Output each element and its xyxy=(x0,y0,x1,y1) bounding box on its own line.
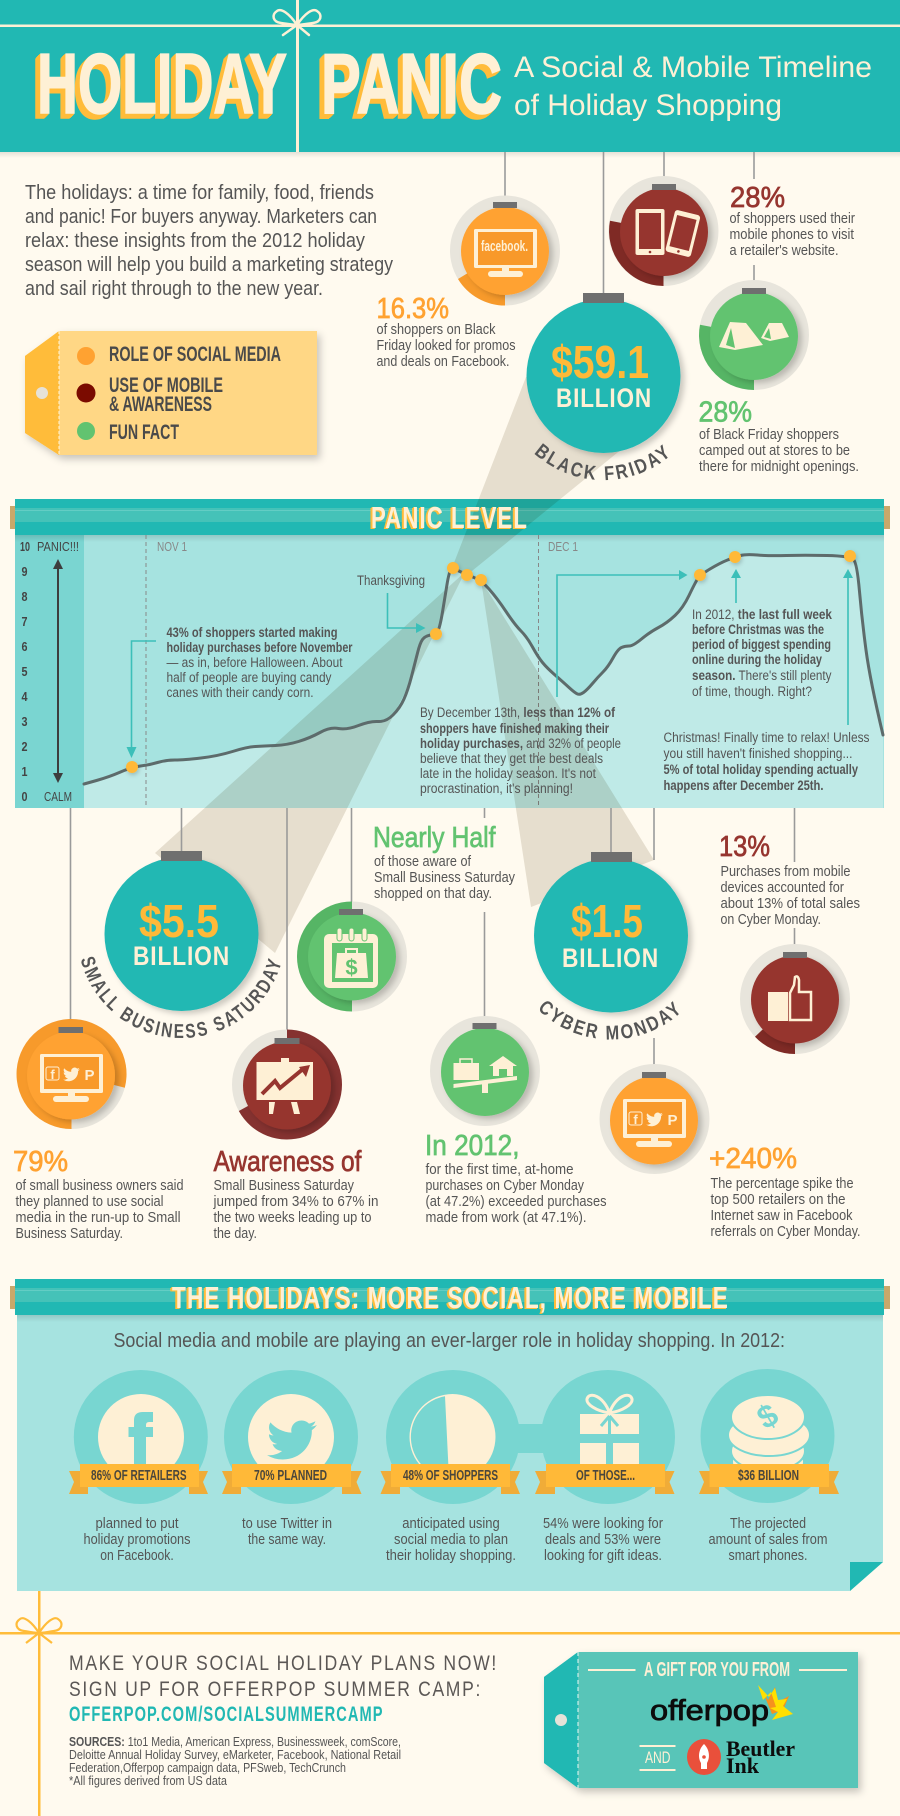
ribbon: 86% OF RETAILERS xyxy=(91,1468,187,1484)
chart axis xyxy=(20,539,578,804)
ribbon xyxy=(69,1464,208,1494)
chart axis: 4 xyxy=(22,689,28,704)
chart note: december 13: late in the holiday season. It's not xyxy=(420,766,596,781)
item: gift: looking for gift ideas. xyxy=(544,1548,662,1564)
stat: 79% xyxy=(13,1146,184,1242)
stat: awareness: the day. xyxy=(214,1226,257,1242)
icon: facebook monitor xyxy=(474,229,537,277)
item: 48% pie: anticipated using xyxy=(402,1516,500,1532)
icon: seesaw xyxy=(454,1056,517,1093)
beam: cyber monday xyxy=(481,580,654,907)
stat: in 2012: In 2012, xyxy=(425,1130,520,1162)
item: 48% pie: their holiday shopping. xyxy=(386,1548,516,1564)
icon: f xyxy=(128,1412,153,1465)
icon: social monitor: f xyxy=(633,1112,638,1127)
chart axis: PANIC!!! xyxy=(37,539,79,554)
label: small business saturday: SMALL BUSINESS SATURDAY xyxy=(81,956,280,1038)
chart note: christmas xyxy=(664,730,870,793)
ornament: small business saturday: BILLION xyxy=(133,941,230,971)
and divider: AND xyxy=(645,1748,670,1767)
chart note: november: 43% of shoppers started making xyxy=(166,625,338,640)
item: facebook: holiday promotions xyxy=(84,1532,190,1548)
ornament: small business saturday xyxy=(81,808,280,1038)
logo: beutler ink xyxy=(687,1736,795,1778)
chart axis: 10 xyxy=(20,539,30,554)
header banner xyxy=(0,0,900,158)
icon: gift box xyxy=(580,1395,639,1465)
logo: beutler ink: Beutler xyxy=(726,1736,795,1761)
title: holiday panic: HOLIDAY xyxy=(37,37,287,132)
chart note: november: — as in, before Halloween. About xyxy=(166,655,343,670)
chart axis: CALM xyxy=(44,789,72,804)
title: holiday panic: PANIC xyxy=(321,37,502,132)
ornament: black friday: $59.1 xyxy=(551,336,649,388)
chart note: november xyxy=(166,625,353,700)
chart note: last full week: In 2012, the last full week xyxy=(692,607,832,622)
chart note: november: canes with their candy corn. xyxy=(166,685,314,700)
stat: 28% camped: there for midnight openings. xyxy=(699,459,859,475)
chart axis: 0 xyxy=(22,789,28,804)
and divider xyxy=(640,1745,676,1771)
ornament: cyber monday: $1.5 xyxy=(571,895,643,947)
intro text: relax: these insights from the 2012 holiday xyxy=(25,230,365,252)
stat: 13%: Purchases from mobile xyxy=(720,864,850,880)
icon: social monitor xyxy=(40,1054,103,1102)
chart note: last full week xyxy=(692,607,832,699)
icon: phones xyxy=(636,209,701,257)
ribbon: 70% PLANNED xyxy=(254,1468,327,1484)
stat: awareness: the two weeks leading up to xyxy=(214,1210,372,1226)
stat: 28% mobile xyxy=(730,182,855,259)
stat: in 2012: for the first time, at-home xyxy=(426,1162,574,1178)
stat: 16.3%: Friday looked for promos xyxy=(376,338,516,354)
ribbon xyxy=(380,1464,520,1494)
chart note: last full week: of time, though. Right? xyxy=(692,684,812,699)
sources xyxy=(69,1735,401,1788)
stat: +240% xyxy=(709,1143,860,1240)
stat: 28% camped: 28% xyxy=(698,396,752,428)
ribbon xyxy=(699,1464,839,1494)
chart axis: 8 xyxy=(22,589,28,604)
chart note: november: half of people are buying candy xyxy=(166,670,332,685)
ornament: black friday xyxy=(526,152,687,480)
gift tag: A GIFT FOR YOU FROM xyxy=(644,1659,790,1681)
chart note: december 13: By December 13th, less than 12% of xyxy=(420,705,615,720)
ornament: cyber monday: BILLION xyxy=(562,943,659,973)
stat: 28% mobile: a retailer's website. xyxy=(730,243,838,259)
item: coins: The projected xyxy=(730,1516,806,1532)
icon: facebook monitor: facebook. xyxy=(481,238,528,255)
item: 48% pie: social media to plan xyxy=(394,1532,508,1548)
item: twitter: to use Twitter in xyxy=(242,1516,332,1532)
icon: social monitor: P xyxy=(667,1112,678,1129)
chart axis: NOV 1 xyxy=(157,539,187,554)
stat: 13%: 13% xyxy=(719,831,770,863)
stat: 28% mobile: mobile phones to visit xyxy=(730,227,854,243)
panel: more social more mobile background xyxy=(17,1315,883,1591)
stat: in 2012: (at 47.2%) exceeded purchases xyxy=(426,1194,606,1210)
chart note: last full week: season. There's still plenty xyxy=(692,668,832,683)
beam: black friday xyxy=(452,377,660,575)
legend tag: FUN FACT xyxy=(109,421,179,444)
ornament: home and work seesaw xyxy=(430,808,540,1126)
stat: nearly half: Small Business Saturday xyxy=(374,870,516,886)
banner: panic level xyxy=(10,499,890,535)
call to action xyxy=(69,1652,498,1726)
icon: easel chart xyxy=(256,1058,313,1114)
stat: in 2012: made from work (at 47.1%). xyxy=(426,1210,586,1226)
stat: nearly half xyxy=(373,822,516,902)
section intro: Social media and mobile are playing an ever-larger role in holiday shopping. In 2012: xyxy=(114,1330,785,1352)
intro text: The holidays: a time for family, food, friends xyxy=(25,182,374,204)
chart note: november: holiday purchases before November xyxy=(166,640,353,655)
icon: calendar with bag: $ xyxy=(345,955,358,980)
chart markers xyxy=(126,550,856,773)
string: to mobile stat xyxy=(753,152,755,179)
chart axis: 2 xyxy=(22,739,28,754)
chart note: last full week: before Christmas was the xyxy=(692,622,824,637)
chart axis: 9 xyxy=(22,564,28,579)
icon: bird xyxy=(267,1421,317,1460)
stat: 16.3%: of shoppers on Black xyxy=(376,322,496,338)
icon: tents xyxy=(719,322,789,350)
ribbon: 48% OF SHOPPERS xyxy=(403,1468,498,1484)
ornament: awareness chart xyxy=(232,808,342,1140)
intro text: and panic! For buyers anyway. Marketers can xyxy=(25,206,377,228)
stat: +240%: referrals on Cyber Monday. xyxy=(710,1224,860,1240)
chart axis: 3 xyxy=(22,714,28,729)
item: gift: 54% were looking for xyxy=(543,1516,663,1532)
chart axis: 5 xyxy=(22,664,28,679)
label: black friday: BLACK FRIDAY xyxy=(534,443,668,480)
ornament: social monitor +240% xyxy=(600,808,710,1174)
logo: beutler ink: Ink xyxy=(726,1753,760,1778)
stat: awareness: Awareness of xyxy=(214,1146,362,1178)
panic level heading: PANIC LEVEL xyxy=(371,500,528,535)
subtitle xyxy=(514,51,872,122)
icon: social monitor xyxy=(623,1099,686,1147)
icon: social monitor: P xyxy=(84,1067,95,1084)
item: coins: amount of sales from xyxy=(708,1532,828,1548)
call to action: OFFERPOP.COM/SOCIALSUMMERCAMP xyxy=(69,1703,384,1726)
chart axis: 1 xyxy=(22,764,28,779)
beam: small business saturday xyxy=(155,572,465,953)
stat: 79%: 79% xyxy=(13,1146,68,1178)
stat: 79%: of small business owners said xyxy=(16,1178,184,1194)
icon: calendar with bag xyxy=(324,928,378,988)
chart note: december 13: holiday purchases, and 32% of people xyxy=(420,736,621,751)
stat: 13%: on Cyber Monday. xyxy=(720,912,821,928)
ribbon: $36 BILLION xyxy=(738,1468,799,1484)
sources: Federation,Offerpop campaign data, PFSweb, TechCrunch xyxy=(69,1761,346,1775)
connector between circles xyxy=(516,1424,543,1453)
ornament: black friday: BILLION xyxy=(556,383,652,413)
stat: awareness xyxy=(213,1146,378,1242)
chart note: december 13: shoppers have finished making their xyxy=(420,721,610,736)
chart axis: 6 xyxy=(22,639,28,654)
legend tag: USE OF MOBILE xyxy=(109,374,223,397)
stat: 79%: they planned to use social xyxy=(16,1194,164,1210)
ornament: facebook black friday xyxy=(450,152,560,306)
stat: 16.3%: and deals on Facebook. xyxy=(376,354,510,370)
panic curve xyxy=(84,555,883,784)
ornament: tents xyxy=(699,265,809,390)
chart note: last full week: period of biggest spending xyxy=(692,637,831,652)
stat: 13% xyxy=(719,831,860,928)
label: cyber monday: CYBER MONDAY xyxy=(540,1001,679,1040)
stat: +240%: The percentage spike the xyxy=(710,1176,854,1192)
stat: nearly half: of those aware of xyxy=(374,854,472,870)
icon: thumb xyxy=(768,976,811,1021)
legend tag: ROLE OF SOCIAL MEDIA xyxy=(109,343,281,366)
legend tag: & AWARENESS xyxy=(109,393,212,416)
stat: 28% camped xyxy=(698,396,859,475)
chart note: december 13: procrastination, it's planning! xyxy=(420,781,573,796)
sources: *All figures derived from US data xyxy=(69,1774,227,1788)
stat: 28% mobile: of shoppers used their xyxy=(730,211,855,227)
stat: 28% camped: of Black Friday shoppers xyxy=(699,427,839,443)
item: gift xyxy=(535,1370,675,1564)
subtitle: A Social & Mobile Timeline xyxy=(514,51,872,84)
panel: panic level chart xyxy=(15,535,884,808)
chart note: last full week: online during the holiday xyxy=(692,652,822,667)
stat: in 2012: purchases on Cyber Monday xyxy=(426,1178,585,1194)
chart axis: DEC 1 xyxy=(548,539,578,554)
stat: +240%: Internet saw in Facebook xyxy=(710,1208,853,1224)
item: coins xyxy=(699,1369,839,1564)
item: coins: smart phones. xyxy=(728,1548,808,1564)
stat: 16.3% xyxy=(376,293,516,370)
logo: offerpop: offerpop xyxy=(650,1695,769,1727)
chart note: christmas: Christmas! Finally time to relax! Unless xyxy=(664,730,870,745)
stat: nearly half: Nearly Half xyxy=(373,822,496,854)
item: gift: deals and 53% were xyxy=(545,1532,661,1548)
ornament: thumbs up xyxy=(740,808,850,1054)
icon: social monitor: f xyxy=(50,1067,55,1082)
ribbon: OF THOSE... xyxy=(576,1468,635,1484)
chart axis: 7 xyxy=(22,614,28,629)
ornament: mobile phones xyxy=(608,152,718,286)
call to action: SIGN UP FOR OFFERPOP SUMMER CAMP: xyxy=(69,1678,482,1701)
ribbon xyxy=(222,1464,362,1494)
footer ribbon xyxy=(0,1591,900,1816)
stat: 79%: media in the run-up to Small xyxy=(16,1210,180,1226)
gift tag xyxy=(544,1652,858,1788)
item: twitter xyxy=(222,1370,362,1548)
stat: 28% camped: camped out at stores to be xyxy=(699,443,850,459)
stat: +240%: +240% xyxy=(709,1143,797,1175)
chart note: thanksgiving: Thanksgiving xyxy=(357,573,425,588)
item: twitter: the same way. xyxy=(248,1532,326,1548)
item: facebook xyxy=(69,1370,208,1564)
stat: 79%: Business Saturday. xyxy=(16,1226,123,1242)
subtitle: of Holiday Shopping xyxy=(514,89,782,122)
stat: awareness: jumped from 34% to 67% in xyxy=(213,1194,378,1210)
ornament: cyber monday xyxy=(534,808,694,1040)
logo: offerpop xyxy=(650,1685,793,1727)
item: coins: $ xyxy=(751,1396,784,1436)
stat: +240%: top 500 retailers on the xyxy=(710,1192,846,1208)
icon: ribbon bow xyxy=(274,10,320,35)
ornament: calendar xyxy=(297,808,407,1012)
intro text xyxy=(25,182,393,300)
intro text: season will help you build a marketing strategy xyxy=(25,254,393,276)
chart note: christmas: 5% of total holiday spending actually xyxy=(664,762,858,777)
chart arrows xyxy=(126,569,853,758)
stat: 16.3%: 16.3% xyxy=(376,293,449,325)
string: to small business owners stat xyxy=(70,808,72,1027)
chart note: december 13: believe that they get the best deals xyxy=(420,751,603,766)
stat: in 2012 xyxy=(425,1130,606,1226)
stat: 28% mobile: 28% xyxy=(730,182,785,214)
stat: nearly half: shopped on that day. xyxy=(374,886,492,902)
sources: Deloitte Annual Holiday Survey, eMarketer, Facebook, National Retail xyxy=(69,1748,401,1762)
chart note: christmas: happens after December 25th. xyxy=(664,778,824,793)
stat: 13%: devices accounted for xyxy=(720,880,844,896)
legend tag xyxy=(25,331,317,455)
item: facebook: planned to put xyxy=(96,1516,178,1532)
sources: SOURCES: 1to1 Media, American Express, Businessweek, comScore, xyxy=(69,1735,401,1749)
item: facebook: on Facebook. xyxy=(100,1548,174,1564)
stat: 13%: about 13% of total sales xyxy=(720,896,860,912)
chart note: christmas: you still haven't finished shopping... xyxy=(664,746,852,761)
ornament: social monitor 79% xyxy=(16,1019,127,1129)
ribbon xyxy=(535,1464,674,1494)
intro text: and sail right through to the new year. xyxy=(25,278,323,300)
call to action: MAKE YOUR SOCIAL HOLIDAY PLANS NOW! xyxy=(69,1652,498,1675)
ornament: small business saturday: $5.5 xyxy=(139,895,219,947)
icon: coin stack xyxy=(728,1395,810,1480)
chart note: december 13 xyxy=(420,705,621,796)
stat: awareness: Small Business Saturday xyxy=(214,1178,355,1194)
item: 48% pie xyxy=(380,1370,520,1564)
